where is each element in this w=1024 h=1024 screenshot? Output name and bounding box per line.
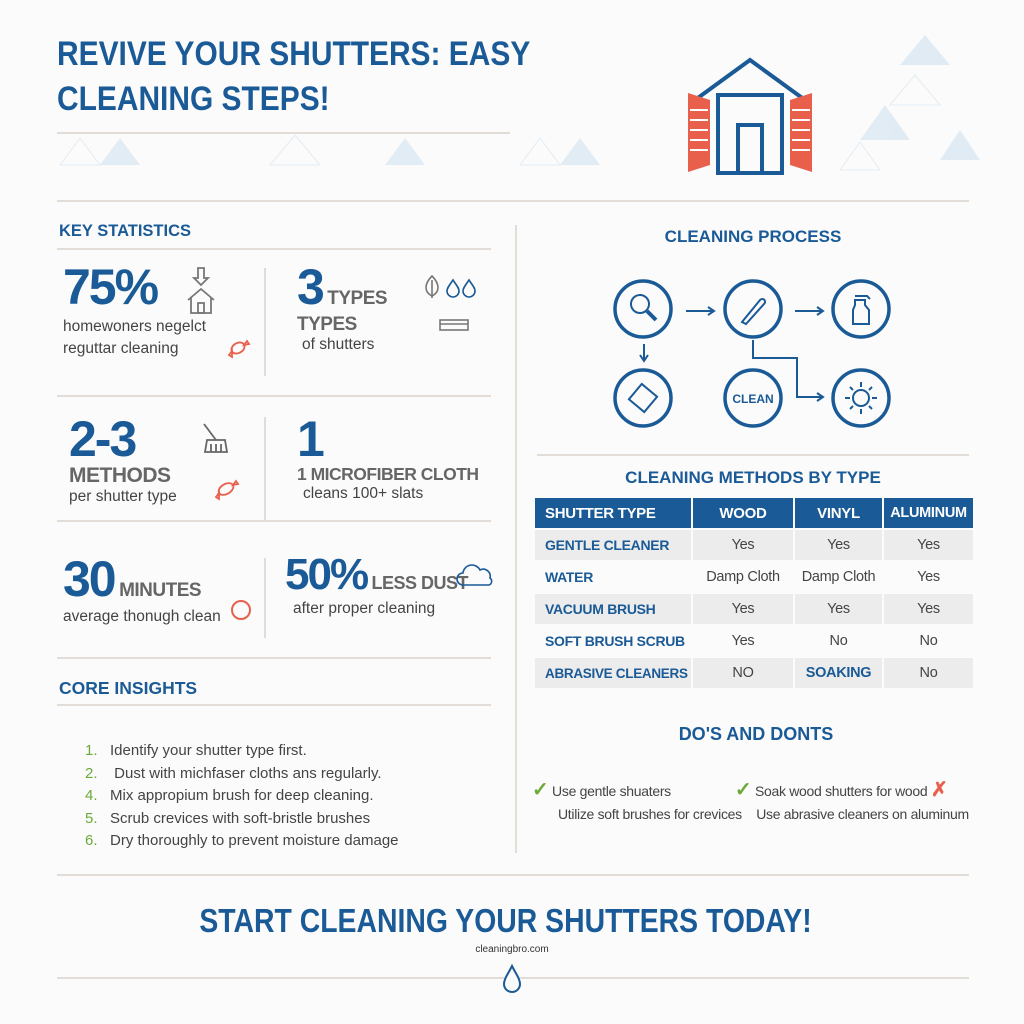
chart: process flow: CLEAN	[732, 392, 774, 406]
panel: core insights	[57, 678, 491, 849]
table: cleaning methods: Yes	[917, 601, 940, 617]
table: cleaning methods: SOFT BRUSH SCRUB	[545, 633, 685, 649]
table: cleaning methods: VACUUM BRUSH	[545, 601, 655, 617]
table: cleaning methods: WOOD	[719, 504, 767, 522]
table: cleaning methods: Damp Cloth	[802, 569, 875, 585]
table: cleaning methods: Yes	[917, 569, 940, 585]
title	[57, 35, 530, 118]
stat: microfiber cloth: 1	[297, 411, 323, 467]
call to action: START CLEANING YOUR SHUTTERS TODAY!	[199, 902, 812, 939]
numbered list: 6. Dry thoroughly to prevent moisture damage	[85, 832, 398, 849]
heading: key statistics: KEY STATISTICS	[59, 222, 191, 240]
table: cleaning methods: GENTLE CLEANER	[545, 537, 669, 553]
do's and donts list	[532, 779, 969, 822]
stat: 75%: 75%	[63, 259, 157, 315]
do's and donts list: Utilize soft brushes for crevices Use abrasive cleaners on aluminum	[558, 806, 969, 822]
icon: house with shutters	[688, 58, 812, 175]
table: cleaning methods: Yes	[732, 537, 754, 553]
stat: 30 minutes: 30 MINUTES	[63, 551, 201, 607]
numbered list: 2. Dust with michfaser cloths ans regularly.	[85, 764, 382, 782]
stat: 75%: homewoners negelct	[63, 318, 206, 335]
heading: do's and donts: DO'S AND DONTS	[679, 724, 833, 744]
numbered list	[85, 742, 398, 849]
numbered list: 5. Scrub crevices with soft-bristle brushes	[85, 810, 370, 826]
table: cleaning methods: No	[920, 633, 937, 649]
heading: cleaning methods by type: CLEANING METHODS BY TYPE	[625, 468, 881, 487]
stat: microfiber cloth: 1 MICROFIBER CLOTH	[297, 464, 479, 484]
icon: clock	[231, 600, 251, 620]
stat: 2-3 methods	[69, 411, 177, 505]
chart: process flow	[613, 279, 891, 428]
table: cleaning methods: Damp Cloth	[706, 569, 780, 585]
table: cleaning methods: ALUMINUM	[890, 505, 967, 521]
stat: 2-3 methods: per shutter type	[69, 488, 177, 505]
stat: microfiber cloth: cleans 100+ slats	[303, 485, 423, 502]
table: cleaning methods: Yes	[827, 537, 850, 553]
icon: house arrow	[188, 267, 214, 314]
numbered list: 1. Identify your shutter type first.	[85, 742, 307, 759]
table: cleaning methods: Yes	[732, 633, 754, 649]
table: cleaning methods: Yes	[827, 601, 850, 617]
table: cleaning methods: No	[830, 633, 847, 649]
table: cleaning methods: SOAKING	[806, 665, 871, 681]
stat: microfiber cloth	[297, 411, 479, 502]
icon: water drop	[503, 964, 521, 993]
panel: key statistics	[57, 222, 492, 659]
stat: 3 types: 3 TYPES	[297, 259, 387, 315]
table: cleaning methods: NO	[732, 665, 754, 681]
icon: cloud	[456, 564, 492, 586]
numbered list: 4. Mix appropium brush for deep cleaning.	[85, 787, 374, 804]
table: cleaning methods: VINYL	[817, 504, 860, 522]
source: cleaningbro.com	[475, 944, 549, 955]
table: cleaning methods: Yes	[732, 601, 754, 617]
stat: 75%: reguttar cleaning	[63, 340, 178, 357]
stat: 3 types	[297, 259, 387, 353]
heading: core insights: CORE INSIGHTS	[59, 678, 197, 698]
table: cleaning methods: ABRASIVE CLEANERS	[545, 666, 688, 680]
stat: 2-3 methods: 2-3	[69, 411, 135, 467]
stat: 50% less dust: 50% LESS DUST	[285, 550, 468, 599]
stat: 3 types: TYPES	[297, 314, 357, 335]
table: cleaning methods: Yes	[917, 537, 940, 553]
table: cleaning methods: WATER	[545, 569, 593, 585]
stat: 3 types: of shutters	[302, 336, 374, 353]
icon: candy red 2	[214, 480, 240, 501]
icon: candy red	[228, 340, 250, 359]
title: REVIVE YOUR SHUTTERS: EASY	[57, 35, 530, 73]
table: cleaning methods	[535, 498, 973, 688]
icon: brush	[203, 424, 228, 453]
table: cleaning methods: SHUTTER TYPE	[545, 504, 656, 522]
background triangles	[59, 35, 980, 170]
title: CLEANING STEPS!	[57, 80, 330, 118]
table: cleaning methods: No	[920, 665, 937, 681]
icon: leaf and drops	[425, 275, 476, 331]
stat: 50% less dust: after proper cleaning	[293, 600, 435, 617]
stat: 75%	[63, 259, 206, 357]
do's and donts list: ✓ Use gentle shuaters ✓ Soak wood shutters for wood ✗	[532, 779, 947, 801]
stat: 30 minutes: average thonugh clean	[63, 608, 221, 625]
stat: 2-3 methods: METHODS	[69, 464, 170, 487]
stat: 30 minutes	[63, 551, 221, 625]
heading: cleaning process: CLEANING PROCESS	[665, 227, 841, 246]
